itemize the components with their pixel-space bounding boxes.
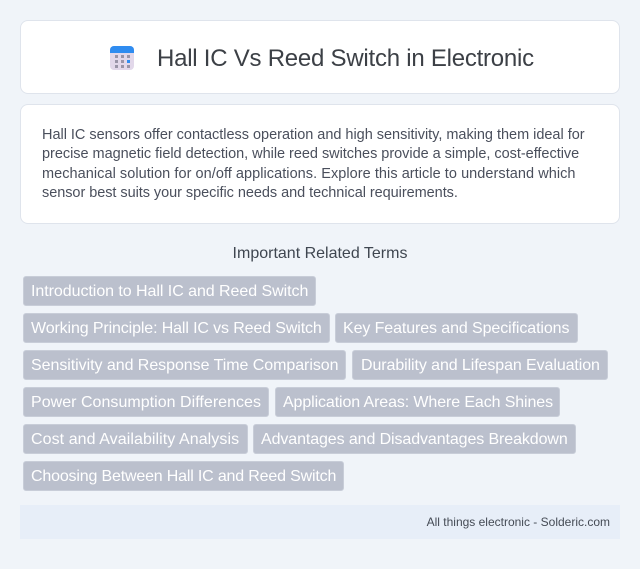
footer bar: [20, 505, 620, 539]
icon: calendar: [110, 46, 134, 70]
tag: [23, 313, 330, 343]
intro panel: [20, 104, 620, 224]
tag: Choosing Between Hall IC and Reed Switch: [31, 468, 336, 485]
tag: Sensitivity and Response Time Comparison: [31, 357, 338, 374]
tag: Introduction to Hall IC and Reed Switch: [31, 283, 308, 300]
title: Hall IC Vs Reed Switch in Electronic: [157, 45, 534, 72]
intro text: precise magnetic field detection, while reed switches provide a simple, cost-effective: [42, 146, 579, 162]
related terms tags: [23, 276, 608, 491]
intro text: Hall IC sensors offer contactless operation and high sensitivity, making them ideal for: [42, 126, 585, 142]
tag: Durability and Lifespan Evaluation: [361, 357, 600, 374]
tag: Key Features and Specifications: [343, 320, 569, 337]
section heading: Important Related Terms: [233, 245, 407, 262]
intro text: sensor best suits your specific needs and technical requirements.: [42, 185, 458, 201]
intro text: [42, 126, 585, 201]
tag: [23, 387, 269, 417]
tag: [23, 461, 344, 491]
tag: Working Principle: Hall IC vs Reed Switch: [31, 320, 322, 337]
tag: [253, 424, 576, 454]
intro text: mechanical solution for on/off applications. Explore this article to understand which: [42, 166, 576, 182]
tag: [23, 276, 316, 306]
footer text: All things electronic - Solderic.com: [427, 515, 610, 529]
tag: [275, 387, 560, 417]
tag: Cost and Availability Analysis: [31, 431, 239, 448]
tag: [23, 424, 248, 454]
tag: [335, 313, 578, 343]
tag: [352, 350, 608, 380]
header panel: [20, 20, 620, 94]
tag: [23, 350, 346, 380]
tag: Power Consumption Differences: [31, 394, 261, 411]
tag: Application Areas: Where Each Shines: [283, 394, 553, 411]
tag: Advantages and Disadvantages Breakdown: [261, 431, 568, 448]
